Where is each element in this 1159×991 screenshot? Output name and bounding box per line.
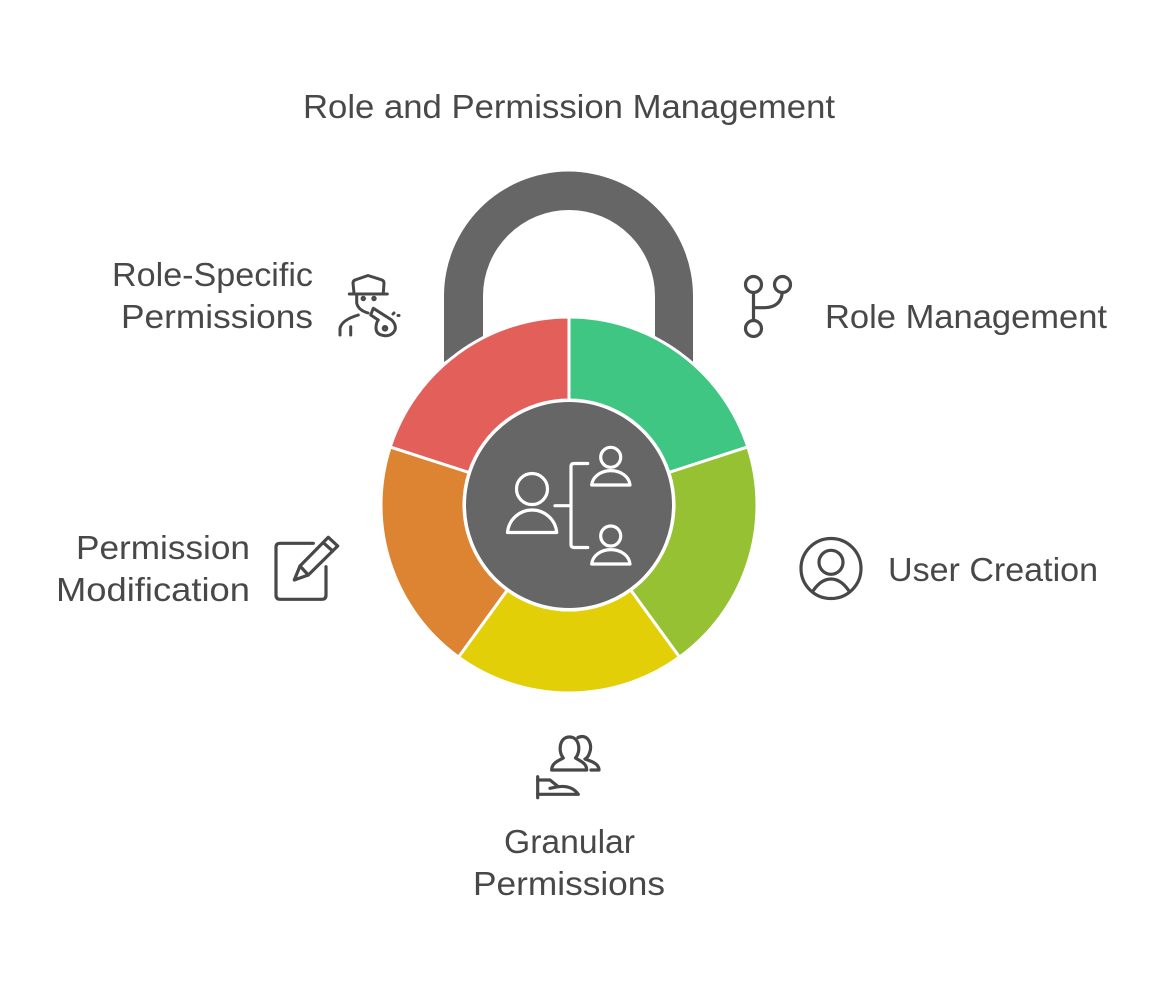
label: user creation: User Creation bbox=[888, 551, 1098, 588]
label: role-specific permissions bbox=[112, 256, 313, 335]
icon: user hierarchy bbox=[508, 447, 630, 564]
icon: user circle bbox=[801, 538, 861, 598]
label: role management: Role Management bbox=[825, 298, 1107, 335]
icon: people on hand bbox=[538, 737, 599, 798]
segment: role-specific permissions bbox=[390, 317, 569, 472]
segment: user creation bbox=[631, 447, 757, 657]
title: Role and Permission Management bbox=[303, 88, 835, 125]
icon: pencil on note bbox=[276, 537, 338, 599]
label: permission modification bbox=[56, 529, 250, 608]
label: granular permissions: Granular bbox=[504, 823, 635, 860]
icon: whistle referee bbox=[340, 276, 399, 336]
label: granular permissions: Permissions bbox=[473, 865, 665, 902]
label: permission modification: Modification bbox=[56, 571, 250, 608]
label: role-specific permissions: Role-Specific bbox=[112, 256, 313, 293]
segment: role management bbox=[569, 317, 748, 472]
padlock shackle bbox=[444, 172, 693, 362]
segment: granular permissions bbox=[458, 590, 680, 693]
segment: permission modification bbox=[381, 447, 507, 657]
padlock dial bbox=[381, 317, 757, 693]
centre hub bbox=[464, 400, 674, 610]
icon: branch bbox=[746, 276, 790, 336]
label: granular permissions bbox=[473, 823, 665, 902]
label: permission modification: Permission bbox=[76, 529, 250, 566]
label: role-specific permissions: Permissions bbox=[121, 298, 313, 335]
